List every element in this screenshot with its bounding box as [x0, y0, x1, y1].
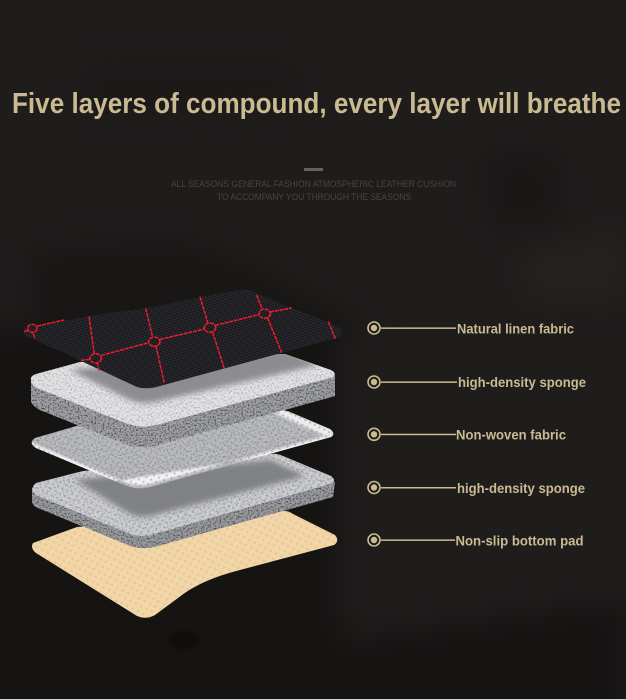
bottom edge — [0, 699, 626, 700]
callout: Non-slip bottom pad: Non-slip bottom pad — [456, 532, 584, 548]
layer 1: natural linen fabric — [24, 290, 342, 388]
callout: high-density sponge (second): high-density sponge — [457, 480, 585, 496]
layer 2: high-density sponge — [31, 350, 335, 448]
subtitle text: TO ACCOMPANY YOU THROUGH THE SEASONS — [217, 192, 411, 202]
subtitle text — [171, 179, 456, 202]
callout: high-density sponge — [368, 374, 586, 390]
layer 4: high-density sponge — [20, 450, 340, 548]
callout: Natural linen fabric: Natural linen fabric — [457, 320, 574, 336]
callout: Non-woven fabric — [368, 427, 566, 443]
callout: high-density sponge (second) — [368, 480, 585, 496]
callout: Non-slip bottom pad — [368, 532, 584, 548]
subtitle text: ALL SEASONS GENERAL FASHION ATMOSPHERIC LEATHER CUSHION — [171, 179, 456, 189]
red stitching — [24, 295, 335, 383]
layer 3: non-woven fabric — [32, 410, 334, 488]
subtitle dash — [304, 168, 323, 171]
callout: Natural linen fabric — [368, 320, 574, 336]
layer 5: non-slip bottom pad — [32, 511, 337, 618]
callout: Non-woven fabric: Non-woven fabric — [456, 427, 566, 443]
callout: high-density sponge: high-density sponge — [458, 374, 586, 390]
